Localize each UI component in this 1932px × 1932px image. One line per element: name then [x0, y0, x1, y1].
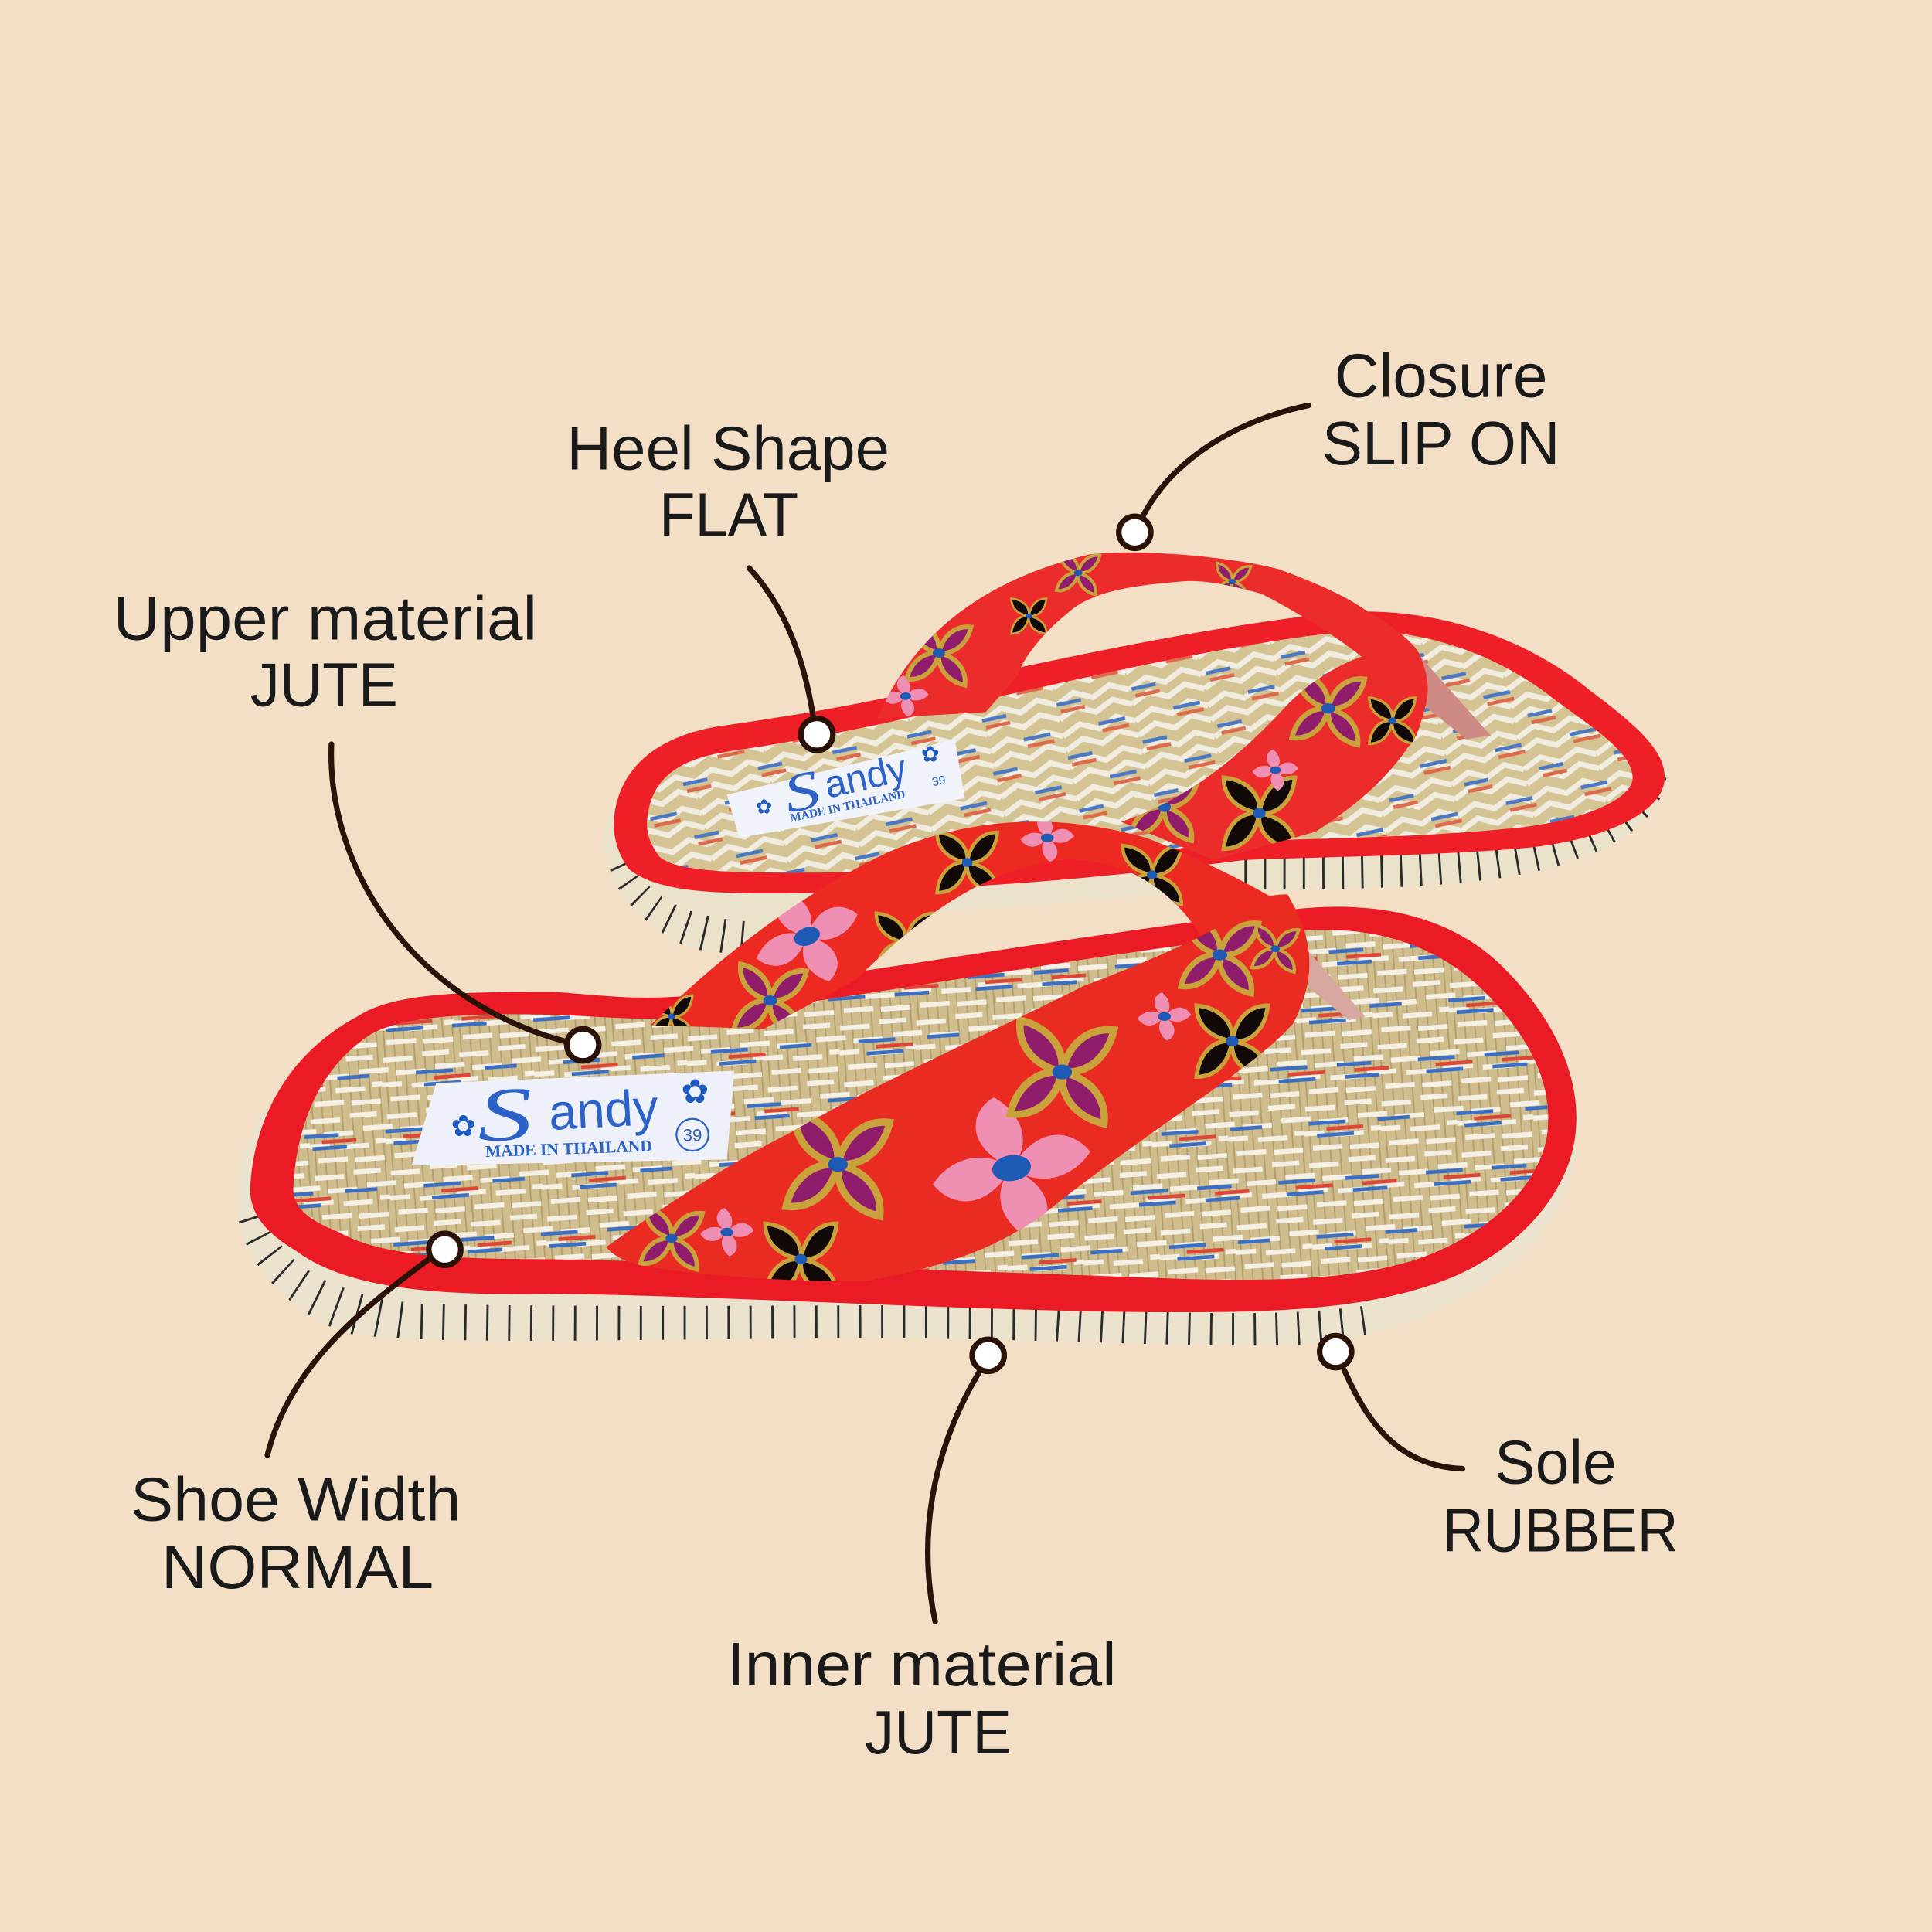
leader: upper material: [332, 744, 564, 1041]
leader: closure: [1142, 406, 1308, 518]
text: upper material: JUTE: [250, 651, 398, 719]
text: closure: [1322, 341, 1560, 478]
back sandal red rim: [614, 611, 1665, 893]
front sandal brand label: 39: [683, 1125, 702, 1145]
text: inner material: JUTE: [865, 1698, 1012, 1767]
photo: back sandal: [604, 530, 1667, 955]
leader: inner material: [928, 1372, 980, 1621]
front sandal woven insole: [293, 930, 1548, 1280]
front sandal brand label: S: [476, 1071, 534, 1158]
text: closure: SLIP ON: [1322, 409, 1560, 478]
front sandal upper strap: [651, 821, 1270, 1029]
callout: heel shape: [566, 413, 889, 750]
back sandal brand label: S: [777, 759, 825, 825]
back sandal brand label: ✿: [921, 740, 940, 767]
front sandal brand label: andy: [547, 1079, 660, 1141]
leader: shoe width: [267, 1259, 429, 1455]
photo: front sandal: [236, 801, 1577, 1345]
text: upper material: [114, 583, 537, 719]
back sandal brand label: 39: [931, 774, 947, 789]
text: shoe width: [131, 1464, 461, 1601]
marker: upper material: [566, 1029, 599, 1061]
text: heel shape: [566, 413, 889, 549]
front sandal red rim: [250, 906, 1577, 1312]
front sandal brand label: MADE IN THAILAND: [485, 1137, 652, 1161]
text: sole: Sole: [1495, 1428, 1617, 1497]
text: closure: Closure: [1335, 341, 1548, 410]
callout: shoe width: [131, 1233, 461, 1601]
text: sole: [1443, 1428, 1679, 1564]
front sandal brand label: [412, 1071, 734, 1165]
leader: sole: [1344, 1370, 1463, 1469]
marker: shoe width: [429, 1233, 461, 1265]
back sandal woven insole: [647, 631, 1633, 872]
back sandal toe plug: [1417, 653, 1491, 740]
marker: closure: [1119, 516, 1151, 549]
text: heel shape: FLAT: [659, 481, 798, 549]
marker: sole: [1320, 1335, 1352, 1368]
front sandal sole stripes: [244, 1219, 1380, 1335]
callout: closure: [1119, 341, 1560, 549]
back sandal brand label: [727, 740, 964, 838]
back sandal sole: [604, 740, 1667, 955]
front sandal brand label: ✿: [451, 1109, 476, 1144]
marker: heel shape: [801, 719, 833, 750]
callout: upper material: [114, 583, 599, 1061]
back sandal strap: [878, 552, 1428, 859]
text: inner material: [727, 1630, 1117, 1767]
text: shoe width: Shoe Width: [131, 1464, 461, 1533]
back sandal brand label: ✿: [756, 795, 772, 818]
marker: inner material: [972, 1339, 1004, 1372]
back sandal brand label: andy: [821, 747, 911, 807]
front sandal brand label: ✿: [681, 1073, 709, 1111]
text: sole: RUBBER: [1443, 1495, 1679, 1564]
callout: sole: [1320, 1335, 1679, 1564]
front sandal toe plug: [1306, 949, 1366, 1020]
front sandal sole: [236, 986, 1577, 1345]
text: inner material: Inner material: [727, 1630, 1117, 1699]
leader: heel shape: [749, 568, 813, 717]
callout: inner material: [727, 1339, 1117, 1767]
front sandal lower strap: [606, 894, 1309, 1281]
back sandal sole stripes: [612, 770, 1663, 943]
text: shoe width: NORMAL: [162, 1532, 434, 1601]
text: heel shape: Heel Shape: [566, 413, 889, 482]
text: upper material: Upper material: [114, 583, 537, 652]
back sandal brand label: MADE IN THAILAND: [789, 788, 906, 825]
